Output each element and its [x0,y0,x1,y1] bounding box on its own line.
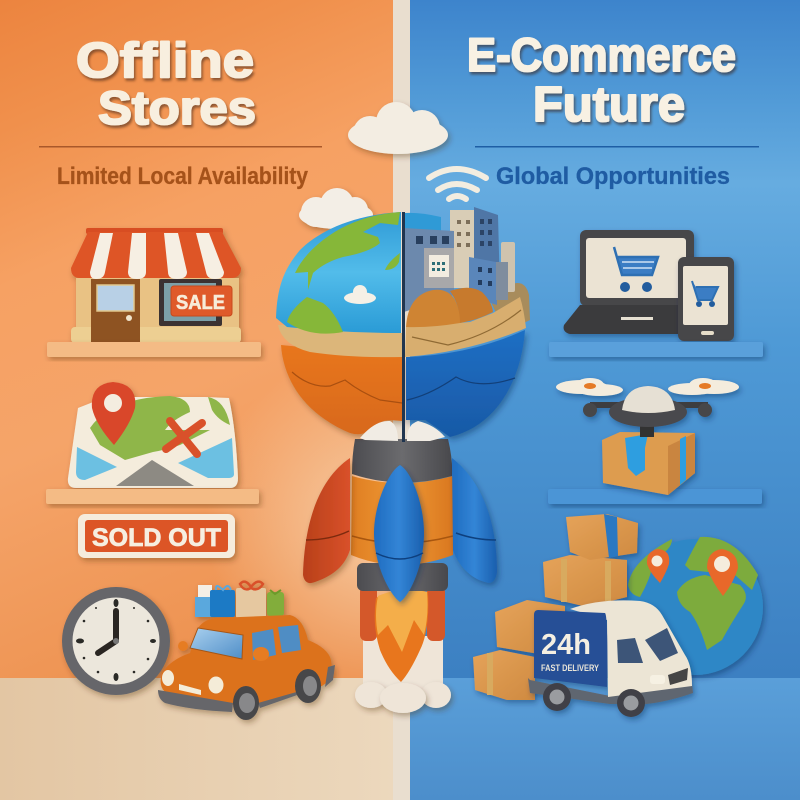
center seam [402,212,405,442]
rocket [303,439,497,713]
truck windshield [645,628,678,661]
rocket lower gray section [357,563,448,591]
building front right [469,257,508,305]
store window [159,279,222,326]
badge: sold out [78,514,235,558]
store wall [76,278,239,330]
white base right [407,421,445,441]
icon: car with gifts [158,582,335,720]
panel: offline background [0,0,394,800]
green continents [287,212,400,334]
parcel left [495,600,565,655]
icon: world globe with pins [627,537,763,675]
parcel bottom [473,650,535,700]
map pin [92,382,135,445]
sale sign: SALE [176,292,225,314]
subtitle: global opportunities: Global Opportunities [496,163,730,190]
shelf: store [47,342,261,357]
striped awning [71,228,241,279]
heading: Offline Stores: Offline [76,34,254,88]
center divider [393,0,410,800]
drone dome [622,386,675,413]
rule: left [39,146,322,148]
badge: sold out: SOLD OUT [92,524,221,552]
map green land [90,396,210,460]
icon: small cloud [299,188,373,229]
rocket center fin [374,465,424,602]
parcel middle [543,555,627,607]
parcel top [566,514,638,560]
shelf: map [46,489,259,504]
white base left [360,421,398,441]
rear bumper [325,665,335,687]
icon: delivery drone [556,378,739,495]
store door [91,279,140,343]
building back tall [450,207,500,292]
left rotor [556,378,623,396]
rocket right fin [452,458,497,583]
rocket top gray section [352,439,452,483]
globe: online half [402,207,530,442]
rock mounds [406,288,493,327]
heading: Offline Stores: Stores [98,81,256,134]
icon: top cloud [348,102,448,154]
truck cargo box [534,610,607,687]
icon: wall clock [62,587,170,695]
globe: offline half [276,212,402,441]
blue lower hemisphere [406,330,525,437]
windshield [190,628,243,659]
rocket orange body [351,476,453,565]
map water right [178,438,234,478]
laptop cart [614,247,658,292]
icon: map with pin [68,382,238,488]
tan front platform [405,297,526,357]
shelf: devices [549,342,763,357]
truck chassis [528,678,693,705]
rocket legs [355,636,451,713]
globe pin left [647,549,669,583]
icon: phone with cart [678,257,734,341]
truck side window [617,638,643,663]
truck cab [570,600,692,697]
clock ticks [76,599,156,681]
clock hands [98,611,116,653]
side mirror left [178,641,188,651]
building front left [404,228,454,312]
icon: parcel stack [473,514,638,700]
rocket nozzles [360,586,445,641]
tan band [278,325,402,357]
gifts on roof [195,582,284,618]
map red x [166,421,202,454]
building small far right [501,242,515,292]
drone body [609,397,687,427]
map water left [76,447,117,480]
side windows [252,625,301,660]
rule: right [475,146,759,148]
truck headlight [650,675,665,684]
front wheel [233,686,259,720]
drone parcel [602,432,695,495]
icon: wifi signal [429,169,486,199]
subtitle: limited local availability: Limited Local Availability [57,163,309,190]
shelf: drone [548,489,762,504]
heading: Offline Stores [76,34,256,134]
phone cart [692,281,718,307]
headlights [162,670,224,694]
icon: storefront [71,228,241,343]
plate [179,684,201,695]
sale sign [171,286,232,316]
orange lower hemisphere [281,345,402,434]
store base [71,327,241,343]
rocket flame [375,590,428,682]
map gray mountain [116,460,194,486]
heading: E-Commerce Future [467,28,736,132]
ocean corner [404,213,441,310]
truck wheels [543,683,645,717]
globe land [628,537,758,650]
car sill [258,691,300,708]
globe pin right [707,549,738,596]
right rotor [668,378,739,395]
drone arms [583,402,712,417]
truck grille [668,668,688,685]
icon: laptop with cart [564,230,694,334]
rear tan rim [490,283,530,332]
rear wheel [295,669,321,703]
laptop base [564,305,694,334]
heading: E-Commerce Future: Future [533,78,685,132]
car body [161,615,333,705]
rocket left fin [303,458,350,583]
heading: E-Commerce Future: E-Commerce [467,28,736,81]
icon: delivery truck [528,600,693,717]
mini cloud on globe [344,285,376,304]
truck cargo box: FAST DELIVERY [541,663,600,674]
car front bumper [158,690,233,712]
truck cargo box: 24h [541,629,591,661]
drone stem [640,425,654,437]
map sheet [68,397,238,488]
mirror [253,647,269,661]
panel: e-commerce background [409,0,800,800]
ocean dome [276,212,401,333]
